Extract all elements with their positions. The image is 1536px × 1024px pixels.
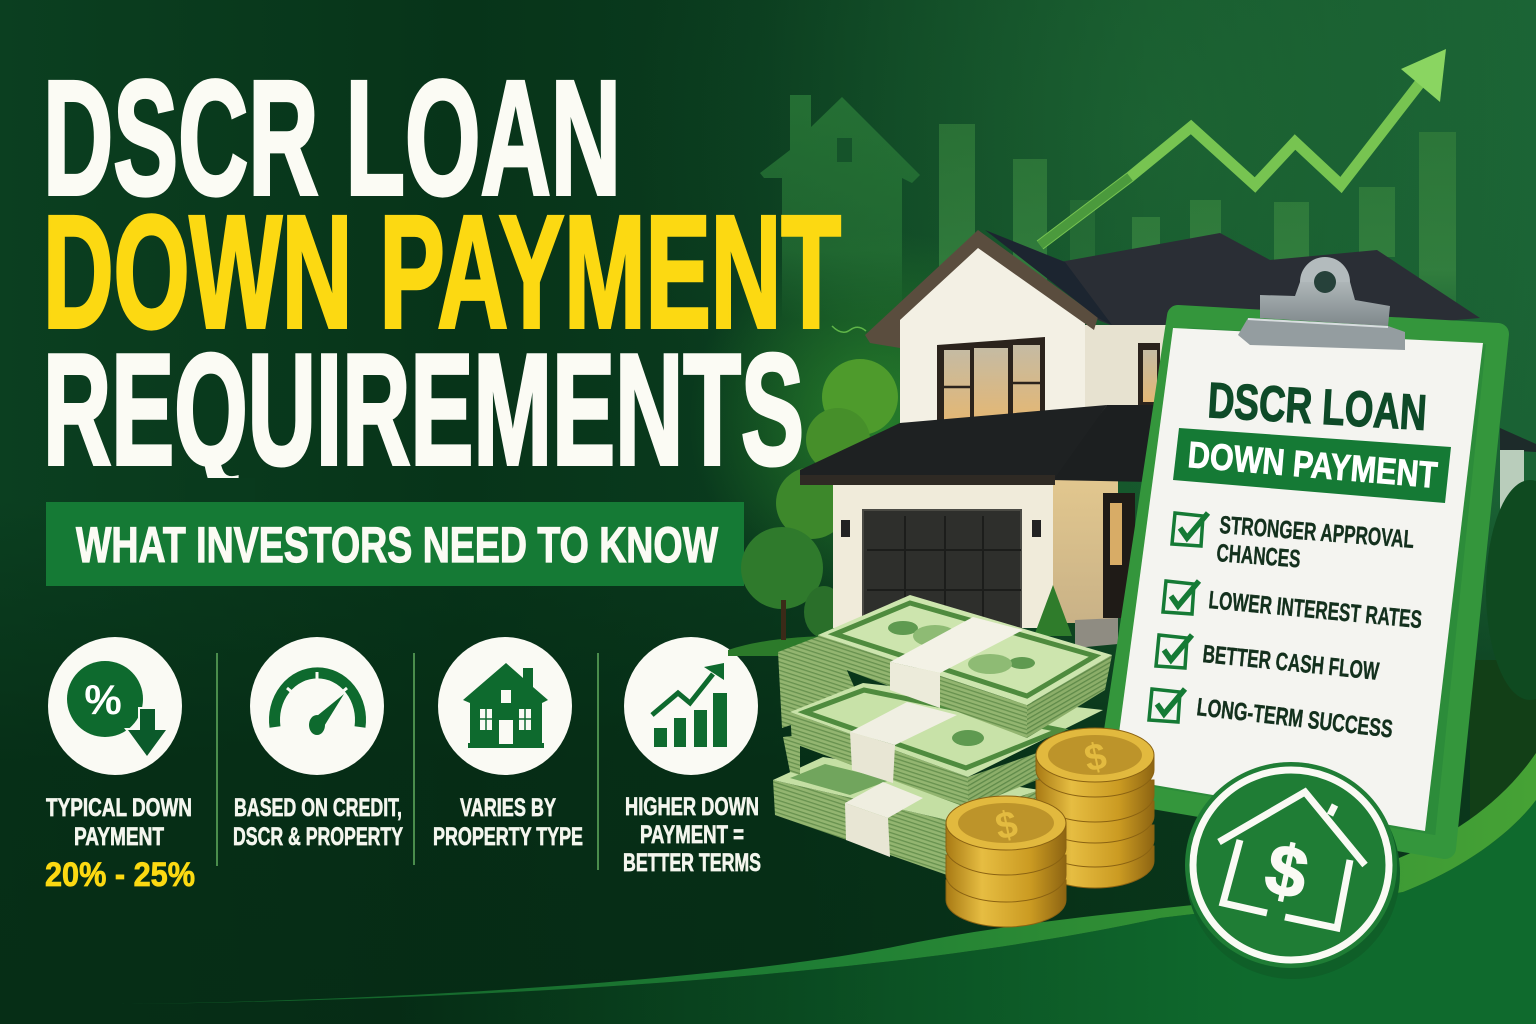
label (623, 793, 761, 877)
icon: percent with down arrow (48, 637, 182, 775)
check list (1149, 511, 1423, 744)
item 1: CHANCES (1216, 539, 1301, 573)
background bar chart (939, 124, 1456, 320)
middle bundle (790, 683, 1103, 808)
feature: typical down payment (45, 637, 195, 894)
item 2 (1163, 581, 1423, 634)
label: BETTER TERMS (623, 849, 761, 877)
background house silhouette (760, 95, 920, 320)
feature: property type (433, 637, 583, 851)
house (800, 230, 1480, 648)
clipboard banner: DOWN PAYMENT (1186, 434, 1439, 496)
rear coin stack (1036, 728, 1154, 888)
label: HIGHER DOWN (625, 793, 759, 821)
rising arrow line (1040, 49, 1446, 245)
icon: percent with down arrow: % (84, 676, 122, 723)
label: VARIES BY (460, 794, 556, 822)
dividers (217, 653, 598, 870)
icon: house (438, 637, 572, 775)
upper walls (900, 246, 1085, 423)
steps (1075, 618, 1118, 648)
conifer shrub (1034, 585, 1072, 636)
icon: gauge (250, 637, 384, 775)
label: BASED ON CREDIT, (234, 794, 402, 822)
clip (1238, 257, 1405, 350)
label: PROPERTY TYPE (433, 823, 583, 851)
subtitle banner (46, 502, 744, 586)
title line: DSCR LOAN: DSCR LOAN (43, 46, 621, 229)
item 4: LONG-TERM SUCCESS (1195, 693, 1394, 744)
item 1 (1172, 511, 1415, 573)
front gable roof (865, 230, 1098, 348)
lower walls (833, 478, 1055, 628)
upper window (937, 337, 1045, 424)
badge dollar sign: $ (1259, 829, 1314, 915)
wall lights (841, 520, 1041, 537)
garage door (863, 510, 1021, 628)
top bundle (818, 595, 1112, 738)
board (1106, 316, 1498, 848)
label (233, 794, 403, 851)
percentage range: 20% - 25% (45, 856, 195, 894)
title (43, 46, 841, 498)
front door (1103, 493, 1135, 618)
clipboard (1106, 257, 1498, 848)
rear roof (1060, 233, 1480, 345)
item 3 (1156, 635, 1381, 686)
front coin stack (946, 796, 1066, 927)
item 2: LOWER INTEREST RATES (1207, 586, 1423, 634)
label: PAYMENT (74, 823, 164, 851)
label: PAYMENT = (640, 821, 744, 849)
badge base (1186, 767, 1400, 979)
ground field and swoosh (120, 753, 1536, 1024)
icon: growth chart (624, 637, 758, 775)
rear coin stack: $ (1081, 735, 1110, 781)
lower roof (1050, 405, 1155, 482)
badge: house with dollar (1185, 762, 1400, 979)
paper (1113, 328, 1483, 831)
front coin stack: $ (992, 803, 1021, 849)
lawn patches (728, 428, 1536, 860)
item 1: STRONGER APPROVAL (1219, 511, 1415, 554)
feature: based on credit (233, 637, 403, 851)
label: TYPICAL DOWN (46, 794, 192, 822)
item 4 (1149, 689, 1394, 744)
feature: better terms (623, 637, 761, 877)
side upper wall (1085, 325, 1170, 415)
lower bundle (773, 757, 1040, 875)
filler bundle (783, 735, 800, 775)
title line: DOWN PAYMENT: DOWN PAYMENT (43, 182, 841, 361)
trees (741, 359, 1536, 700)
subtitle banner: WHAT INVESTORS NEED TO KNOW (76, 517, 719, 573)
label: DSCR & PROPERTY (233, 823, 403, 851)
clipboard heading: DSCR LOAN (1206, 372, 1428, 441)
coin stacks (946, 728, 1154, 927)
title line: REQUIREMENTS: REQUIREMENTS (43, 322, 804, 498)
badge house outline (1219, 792, 1365, 928)
money stacks (773, 595, 1112, 875)
item 3: BETTER CASH FLOW (1201, 640, 1381, 686)
label (46, 794, 192, 851)
label (433, 794, 583, 851)
rear left bundle (778, 632, 860, 728)
